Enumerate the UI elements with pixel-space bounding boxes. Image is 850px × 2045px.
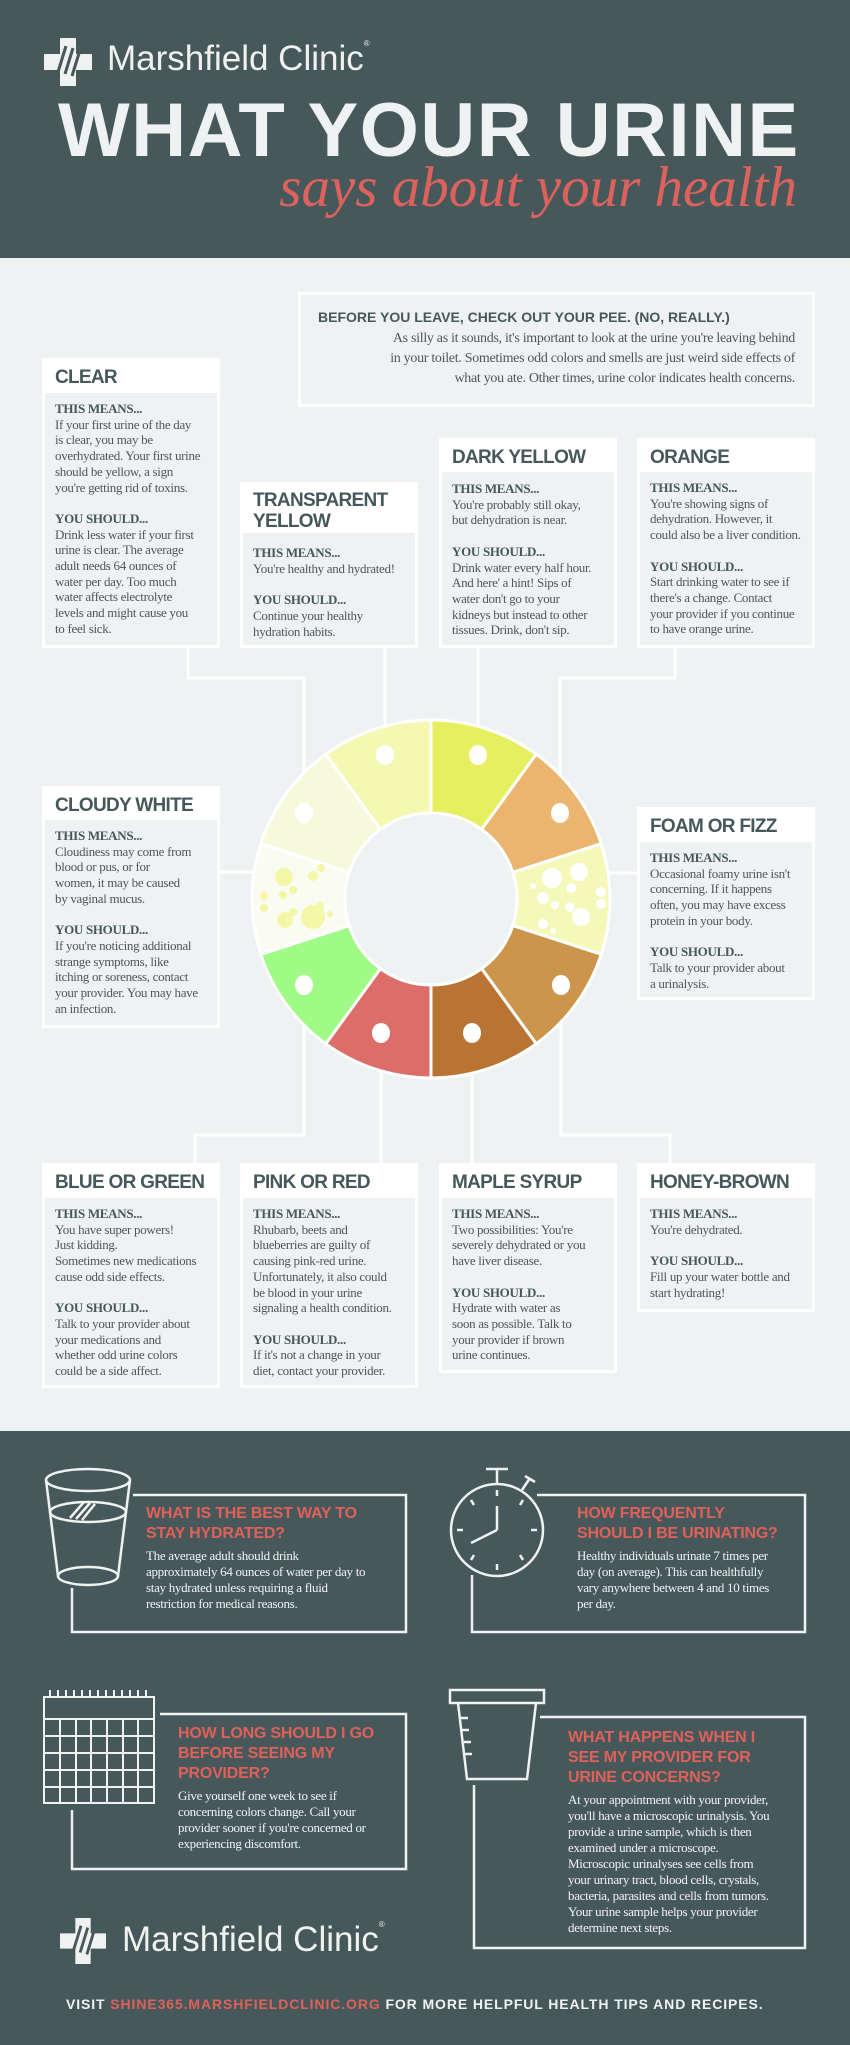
question: how long: experiencing discomfort. <box>178 1836 301 1851</box>
card: orange: could also be a liver condition. <box>650 527 801 542</box>
card: maple syrup <box>439 1163 617 1373</box>
card: transparent yellow: YOU SHOULD... <box>253 592 346 607</box>
card: transparent yellow: THIS MEANS... <box>253 545 340 560</box>
card: orange: YOU SHOULD... <box>650 559 743 574</box>
icon: glass <box>46 1469 130 1585</box>
card: pink or red: YOU SHOULD... <box>253 1332 346 1347</box>
card: blue or green <box>42 1163 220 1388</box>
card: blue or green: Just kidding. <box>55 1237 118 1252</box>
card: orange: your provider if you continue <box>650 606 794 621</box>
card: dark yellow: but dehydration is near. <box>452 512 567 527</box>
question: how long: Give yourself one week to see if <box>178 1788 337 1803</box>
icon: stopwatch <box>451 1469 543 1576</box>
card: maple syrup: MAPLE SYRUP <box>452 1172 582 1193</box>
card: blue or green: could be a side affect. <box>55 1363 162 1378</box>
card: pink or red: Rhubarb, beets and <box>253 1222 348 1237</box>
card: clear: overhydrated. Your first urine <box>55 448 200 463</box>
question: frequency: day (on average). This can healthfully <box>577 1564 763 1579</box>
card: cloudy white: THIS MEANS... <box>55 828 142 843</box>
card: maple syrup: your provider if brown <box>452 1332 564 1347</box>
card: pink or red: blueberries are guilty of <box>253 1237 370 1252</box>
card: cloudy white: strange symptoms, like <box>55 954 169 969</box>
card: foam or fizz: a urinalysis. <box>650 976 709 991</box>
question: what happens <box>568 1729 770 1935</box>
intro box <box>298 292 815 407</box>
card: honey-brown: start hydrating! <box>650 1285 725 1300</box>
question: what happens: bacteria, parasites and cells from tumors. <box>568 1888 769 1903</box>
card: pink or red: Unfortunately, it also could <box>253 1269 387 1284</box>
card: blue or green: YOU SHOULD... <box>55 1300 148 1315</box>
question: hydration <box>146 1505 365 1611</box>
card: foam or fizz: concerning. If it happens <box>650 881 772 896</box>
question: what happens: WHAT HAPPENS WHEN I <box>568 1729 755 1746</box>
intro text: in your toilet. Sometimes odd colors and smells are just weird side effects of <box>390 351 795 366</box>
question: hydration: approximately 64 ounces of water per day to <box>146 1564 365 1579</box>
card: cloudy white: blood or pus, or for <box>55 859 150 874</box>
card: dark yellow: And here' a hint! Sips of <box>452 575 571 590</box>
card: foam or fizz: FOAM OR FIZZ <box>650 816 777 837</box>
question: how long <box>178 1725 374 1851</box>
icon: specimen cup <box>450 1690 544 1779</box>
foam bubbles <box>530 863 606 934</box>
card: maple syrup: YOU SHOULD... <box>452 1285 545 1300</box>
question: how long: PROVIDER? <box>178 1765 270 1782</box>
logo text: Marshfield Clinic® <box>122 1920 385 1959</box>
card: orange <box>637 438 815 648</box>
card: honey-brown: HONEY-BROWN <box>650 1172 789 1193</box>
card: cloudy white: your provider. You may have <box>55 985 198 1000</box>
question: hydration: stay hydrated unless requiring a fluid <box>146 1580 328 1595</box>
bottom dark section <box>0 1431 850 2045</box>
card: cloudy white: Cloudiness may come from <box>55 844 191 859</box>
card: clear: is clear, you may be <box>55 432 153 447</box>
logo <box>44 38 370 86</box>
question: frequency: Healthy individuals urinate 7 times per <box>577 1548 768 1563</box>
card: blue or green: THIS MEANS... <box>55 1206 142 1221</box>
card: orange: to have orange urine. <box>650 621 753 636</box>
card: foam or fizz: Occasional foamy urine isn't <box>650 866 790 881</box>
card: clear: YOU SHOULD... <box>55 511 148 526</box>
card: blue or green: whether odd urine colors <box>55 1347 177 1362</box>
question: what happens: Microscopic urinalyses see cells from <box>568 1856 753 1871</box>
card: orange: You're showing signs of <box>650 496 768 511</box>
card: foam or fizz: Talk to your provider about <box>650 960 785 975</box>
card: maple syrup: urine continues. <box>452 1347 530 1362</box>
card: maple syrup: soon as possible. Talk to <box>452 1316 572 1331</box>
card: blue or green: cause odd side effects. <box>55 1269 165 1284</box>
card: dark yellow: Drink water every half hour. <box>452 560 591 575</box>
question: how long: BEFORE SEEING MY <box>178 1745 335 1762</box>
card: cloudy white <box>42 786 220 1028</box>
card: maple syrup: Two possibilities: You're <box>452 1222 573 1237</box>
question: what happens: SEE MY PROVIDER FOR <box>568 1749 751 1766</box>
subtitle: says about your health <box>279 156 797 219</box>
card: blue or green: your medications and <box>55 1332 161 1347</box>
logo text: Marshfield Clinic® <box>107 39 370 78</box>
question: what happens: you'll have a microscopic urinalysis. You <box>568 1808 769 1823</box>
card: orange: dehydration. However, it <box>650 511 772 526</box>
card: maple syrup: severely dehydrated or you <box>452 1237 585 1252</box>
question: what happens: your urinary tract, blood cells, crystals, <box>568 1872 759 1887</box>
card: blue or green: BLUE OR GREEN <box>55 1172 204 1193</box>
card: foam or fizz: YOU SHOULD... <box>650 944 743 959</box>
card: transparent yellow: hydration habits. <box>253 624 335 639</box>
question: how long: HOW LONG SHOULD I GO <box>178 1725 374 1742</box>
card: foam or fizz <box>637 807 815 1000</box>
card: clear: levels and might cause you <box>55 605 188 620</box>
connector dots <box>295 745 570 1043</box>
icon: logo cross <box>60 1918 106 1964</box>
card: dark yellow: water don't go to your <box>452 591 560 606</box>
card: cloudy white: by vaginal mucus. <box>55 891 145 906</box>
card: honey-brown: THIS MEANS... <box>650 1206 737 1221</box>
card: blue or green: Talk to your provider about <box>55 1316 190 1331</box>
card: dark yellow: THIS MEANS... <box>452 481 539 496</box>
card: pink or red: PINK OR RED <box>253 1172 370 1193</box>
card: foam or fizz: protein in your body. <box>650 913 753 928</box>
card: maple syrup: have liver disease. <box>452 1253 542 1268</box>
intro text: As silly as it sounds, it's important to look at the urine you're leaving behind <box>393 331 795 346</box>
card: blue or green: You have super powers! <box>55 1222 174 1237</box>
card: pink or red: be blood in your urine <box>253 1285 362 1300</box>
card: clear: should be yellow, a sign <box>55 464 173 479</box>
card: orange: THIS MEANS... <box>650 480 737 495</box>
card: clear: urine is clear. The average <box>55 542 183 557</box>
card: dark yellow: tissues. Drink, don't sip. <box>452 622 569 637</box>
card: cloudy white: women, it may be caused <box>55 875 180 890</box>
icon: logo cross <box>44 38 92 86</box>
card: cloudy white: YOU SHOULD... <box>55 922 148 937</box>
card: dark yellow: DARK YELLOW <box>452 447 585 468</box>
card: maple syrup: Hydrate with water as <box>452 1300 560 1315</box>
card: honey-brown <box>637 1163 815 1312</box>
card: foam or fizz: THIS MEANS... <box>650 850 737 865</box>
card: pink or red <box>240 1163 418 1388</box>
card: cloudy white: CLOUDY WHITE <box>55 795 193 816</box>
card: transparent yellow: YELLOW <box>253 511 330 532</box>
question: what happens: At your appointment with your provider, <box>568 1792 768 1807</box>
question: frequency: SHOULD I BE URINATING? <box>577 1525 778 1542</box>
intro text <box>390 331 796 386</box>
card: transparent yellow: TRANSPARENT <box>253 490 387 511</box>
card: pink or red: signaling a health condition. <box>253 1300 392 1315</box>
question: hydration: STAY HYDRATED? <box>146 1525 285 1542</box>
card: clear: water affects electrolyte <box>55 589 172 604</box>
question: what happens: examined under a microscope. <box>568 1840 718 1855</box>
card: cloudy white: an infection. <box>55 1001 116 1016</box>
card: clear: THIS MEANS... <box>55 401 142 416</box>
question: frequency: HOW FREQUENTLY <box>577 1505 725 1522</box>
question: frequency: per day. <box>577 1596 616 1611</box>
intro heading: BEFORE YOU LEAVE, CHECK OUT YOUR PEE. (NO, REALLY.) <box>318 309 730 325</box>
intro text: what you ate. Other times, urine color indicates health concerns. <box>454 371 795 386</box>
question: frequency <box>577 1505 778 1611</box>
color wheel and connector lines <box>186 648 676 1163</box>
question: how long: provider sooner if you're concerned or <box>178 1820 366 1835</box>
card: foam or fizz: often, you may have excess <box>650 897 786 912</box>
card: clear: adult needs 64 ounces of <box>55 558 176 573</box>
card: pink or red: causing pink-red urine. <box>253 1253 366 1268</box>
card: cloudy white: If you're noticing additional <box>55 938 191 953</box>
card: clear <box>42 358 220 648</box>
card: clear: to feel sick. <box>55 621 111 636</box>
card: dark yellow: You're probably still okay, <box>452 497 581 512</box>
question: what happens: Your urine sample helps your provider <box>568 1904 757 1919</box>
card: cloudy white: itching or soreness, contact <box>55 969 188 984</box>
question: what happens: URINE CONCERNS? <box>568 1769 721 1786</box>
question: hydration: restriction for medical reasons. <box>146 1596 297 1611</box>
card: orange: Start drinking water to see if <box>650 574 789 589</box>
card: clear: CLEAR <box>55 367 117 388</box>
question: hydration: WHAT IS THE BEST WAY TO <box>146 1505 357 1522</box>
card: honey-brown: YOU SHOULD... <box>650 1253 743 1268</box>
card: dark yellow <box>439 438 617 648</box>
question: what happens: determine next steps. <box>568 1920 672 1935</box>
question: frequency: vary anywhere between 4 and 10 times <box>577 1580 769 1595</box>
footer call to action: VISIT SHINE365.MARSHFIELDCLINIC.ORG FOR MORE HELPFUL HEALTH TIPS AND RECIPES. <box>66 1996 764 2012</box>
footer logo <box>60 1918 385 1964</box>
card: maple syrup: THIS MEANS... <box>452 1206 539 1221</box>
icon: calendar <box>44 1690 154 1803</box>
title: WHAT YOUR URINE <box>58 88 800 173</box>
card: clear: Drink less water if your first <box>55 527 194 542</box>
card: orange: there's a change. Contact <box>650 590 772 605</box>
card: transparent yellow: You're healthy and hydrated! <box>253 561 395 576</box>
question: what happens: provide a urine sample, which is then <box>568 1824 752 1839</box>
card: blue or green: Sometimes new medications <box>55 1253 196 1268</box>
header band <box>0 0 850 258</box>
card: transparent yellow: Continue your healthy <box>253 608 363 623</box>
card: clear: water per day. Too much <box>55 574 176 589</box>
card: pink or red: THIS MEANS... <box>253 1206 340 1221</box>
card: pink or red: diet, contact your provider. <box>253 1363 385 1378</box>
card: pink or red: If it's not a change in your <box>253 1347 381 1362</box>
card: dark yellow: YOU SHOULD... <box>452 544 545 559</box>
donut segments <box>252 720 610 1078</box>
card: dark yellow: kidneys but instead to other <box>452 607 587 622</box>
card: honey-brown: You're dehydrated. <box>650 1222 742 1237</box>
card: transparent yellow <box>240 482 418 648</box>
card: orange: ORANGE <box>650 447 729 468</box>
card: clear: If your first urine of the day <box>55 417 191 432</box>
card: clear: you're getting rid of toxins. <box>55 480 188 495</box>
cloudy bubbles <box>260 864 333 929</box>
card: honey-brown: Fill up your water bottle and <box>650 1269 790 1284</box>
question: how long: concerning colors change. Call your <box>178 1804 356 1819</box>
question: hydration: The average adult should drink <box>146 1548 299 1563</box>
